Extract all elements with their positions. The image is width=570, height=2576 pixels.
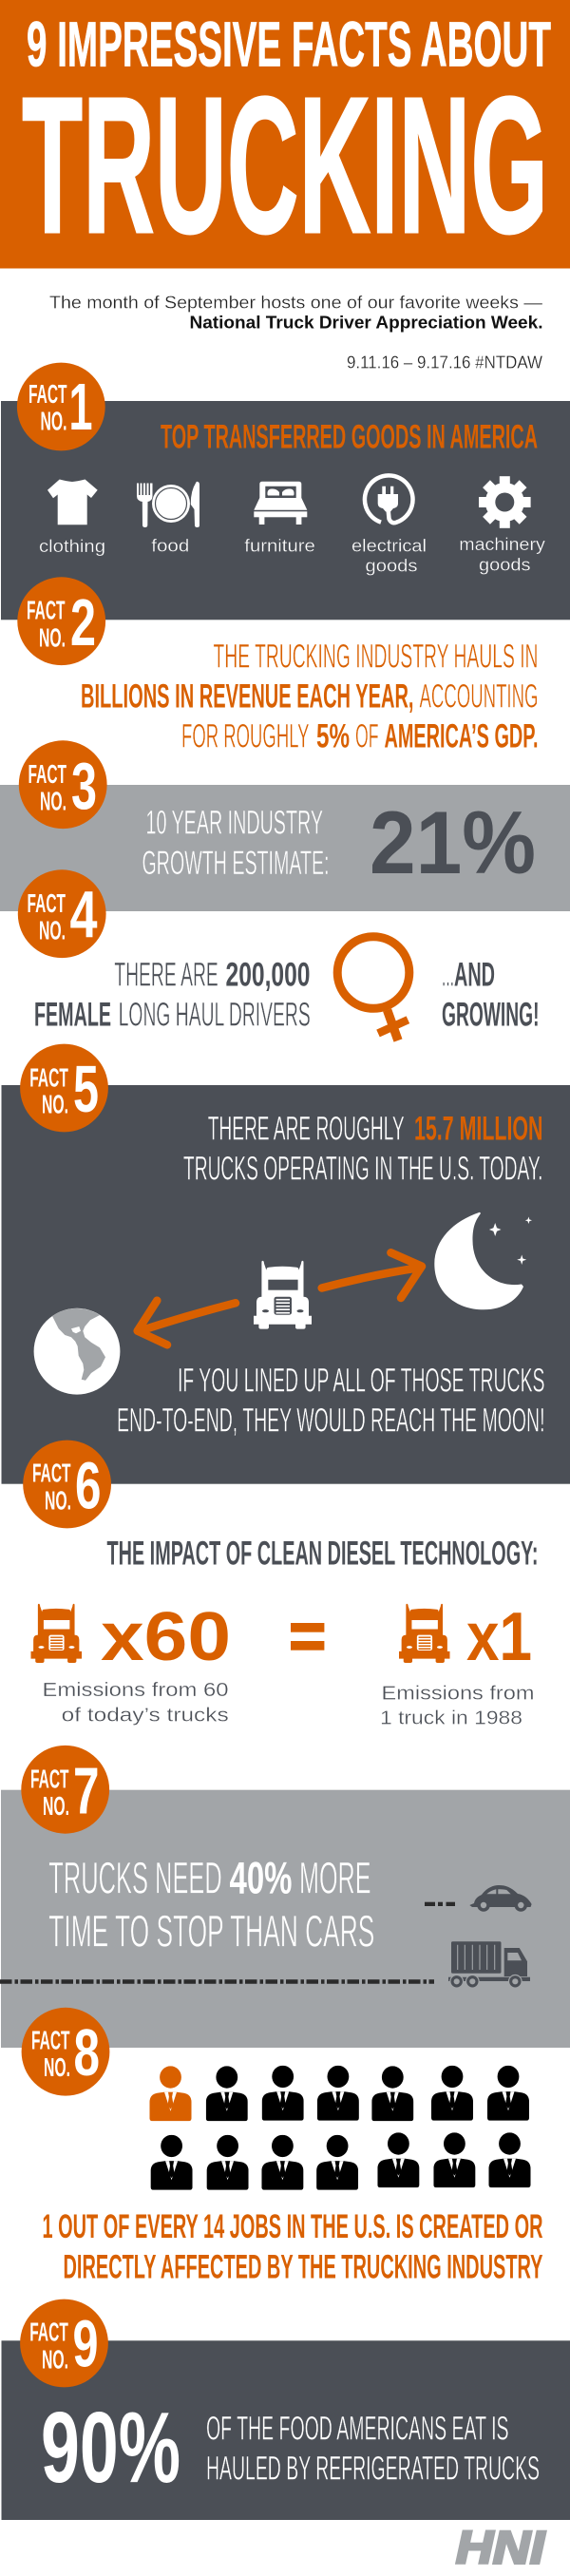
badge: fact no. 3: NO. <box>40 787 66 816</box>
dashed line: car stopping distance <box>425 1902 455 1906</box>
badge: fact no. 5: 5 <box>73 1052 99 1126</box>
text: stopping distance <box>48 1852 374 1956</box>
badge: fact no. 4: 4 <box>70 878 98 952</box>
panel: fact 5 trucks to the moon <box>2 1044 570 1484</box>
badge: fact no. 9: FACT <box>29 2317 68 2346</box>
intro text: 9.11.16 – 9.17.16 #NTDAW <box>347 353 542 372</box>
goods labels <box>39 534 546 575</box>
text: 15.7 million trucks: THERE ARE ROUGHLY <box>208 1109 405 1147</box>
goods labels: food <box>151 535 189 555</box>
badge: fact no. 3: FACT <box>28 759 66 789</box>
badge: fact no. 7: NO. <box>43 1791 69 1821</box>
caption: 60 trucks <box>42 1680 229 1727</box>
arrow: truck to moon <box>322 1252 422 1298</box>
text: stopping distance: MORE <box>299 1852 370 1902</box>
panel: fact 2 revenue <box>17 577 539 755</box>
badge: fact no. 8: FACT <box>31 2026 70 2055</box>
text: growth estimate label <box>142 804 329 882</box>
icon: earth <box>34 1308 120 1395</box>
badge: fact no. 6 <box>23 1441 111 1528</box>
text: 15.7 million trucks <box>183 1109 543 1188</box>
pictogram: 14 workers, one highlighted <box>150 2066 530 2190</box>
text: food hauled <box>206 2409 540 2487</box>
logo: HNI: HNI <box>456 2524 546 2573</box>
badge: fact no. 1: FACT <box>28 379 67 409</box>
icon: t-shirt <box>48 479 98 525</box>
badge: fact no. 2: NO. <box>39 623 66 653</box>
goods labels: electrical <box>352 535 427 555</box>
arrow: truck to earth <box>138 1301 236 1345</box>
goods labels: machinery <box>459 534 546 554</box>
panel: fact 8 jobs <box>22 2008 543 2285</box>
stat: x1: x1 <box>466 1599 532 1675</box>
text: female drivers count: THERE ARE <box>114 955 218 993</box>
badge: fact no. 6: FACT <box>32 1458 71 1487</box>
badge: fact no. 1 <box>17 363 105 450</box>
icon: box truck <box>448 1941 530 1988</box>
text: and growing <box>442 955 540 1033</box>
badge: fact no. 5: FACT <box>29 1062 68 1092</box>
goods labels: goods <box>479 554 530 574</box>
badge: fact no. 9: 9 <box>72 2307 99 2381</box>
goods labels: goods <box>365 555 418 575</box>
text: growth estimate label: 10 YEAR INDUSTRY <box>146 804 323 842</box>
goods labels: clothing <box>39 536 105 556</box>
text: stopping distance: 40% <box>230 1852 293 1902</box>
icon: moon and stars <box>434 1212 532 1309</box>
badge: fact no. 6: 6 <box>75 1448 101 1522</box>
badge: fact no. 5 <box>20 1044 108 1132</box>
panel: fact 9 refrigerated trucks <box>2 2299 570 2520</box>
header banner <box>0 0 570 274</box>
caption: 60 trucks: Emissions from 60 <box>42 1680 228 1701</box>
icon: orange truck left <box>30 1604 82 1663</box>
badge: fact no. 2: FACT <box>27 596 66 625</box>
stat: 90%: 90% <box>41 2392 180 2504</box>
panel: fact 6 clean diesel <box>23 1441 538 1728</box>
text: revenue statement: 5% <box>316 718 350 755</box>
badge: fact no. 3 <box>19 740 107 829</box>
badge: fact no. 2 <box>17 577 105 665</box>
icon: fork, plate and knife <box>137 482 200 527</box>
badge: fact no. 1: 1 <box>68 370 93 444</box>
stat: x60: x60 <box>101 1599 231 1675</box>
text: female drivers count: FEMALE <box>34 996 111 1033</box>
text: revenue statement: OF <box>355 717 378 755</box>
text: growth estimate label: GROWTH ESTIMATE: <box>142 844 329 882</box>
badge: fact no. 7 <box>21 1746 109 1834</box>
badge: fact no. 6: NO. <box>45 1485 71 1515</box>
panel: fact 4 female drivers <box>18 869 540 1040</box>
badge: fact no. 8: NO. <box>44 2052 70 2082</box>
dashed line: truck stopping distance <box>0 1979 434 1984</box>
goods labels: furniture <box>244 535 315 555</box>
badge: fact no. 4: NO. <box>39 915 66 945</box>
equals sign <box>291 1623 324 1651</box>
caption: 60 trucks: of today’s trucks <box>62 1706 229 1727</box>
caption: 1 truck: 1 truck in 1988 <box>380 1708 522 1728</box>
text: 1 in 14 jobs <box>42 2208 543 2285</box>
icon: car <box>469 1885 532 1912</box>
text: stopping distance: TRUCKS NEED <box>48 1852 222 1902</box>
badge: fact no. 9 <box>20 2299 108 2387</box>
intro text: National Truck Driver Appreciation Week. <box>190 313 543 333</box>
badge: fact no. 9: NO. <box>42 2345 68 2375</box>
badge: fact no. 7: FACT <box>30 1765 69 1794</box>
icon: electrical plug <box>365 475 413 523</box>
stat: 21%: 21% <box>370 792 536 892</box>
icon: female symbol <box>337 937 409 1040</box>
text: female drivers count: 200,000 <box>226 956 310 993</box>
text: revenue statement <box>81 637 538 755</box>
caption: 1 truck: Emissions from <box>382 1683 534 1704</box>
badge: fact no. 2: 2 <box>70 585 96 659</box>
intro text <box>49 293 543 372</box>
text: female drivers count <box>34 955 311 1033</box>
icon: orange truck right <box>399 1604 450 1663</box>
badge: fact no. 5: NO. <box>42 1090 68 1119</box>
caption: 1 truck <box>380 1683 534 1728</box>
panel: fact 3 growth estimate <box>0 740 570 911</box>
icon: bed <box>254 482 307 525</box>
text: and growing: ... <box>442 955 454 993</box>
text: and growing: AND <box>454 956 495 993</box>
panel: fact 7 stopping distance <box>0 1746 570 2048</box>
text: revenue statement: FOR ROUGHLY <box>181 717 310 755</box>
badge: fact no. 7: 7 <box>73 1754 99 1828</box>
badge: fact no. 8: 8 <box>74 2015 100 2089</box>
badge: fact no. 3: 3 <box>71 749 97 823</box>
badge: fact no. 1: NO. <box>40 407 66 436</box>
icon: truck front <box>254 1261 312 1329</box>
intro text: The month of September hosts one of our favorite weeks — <box>49 293 543 313</box>
badge: fact no. 4 <box>18 869 106 958</box>
text: reach the moon <box>117 1361 545 1440</box>
icon: gear <box>479 476 531 528</box>
text: female drivers count: LONG HAUL DRIVERS <box>119 995 311 1033</box>
badge: fact no. 8 <box>22 2008 109 2096</box>
badge: fact no. 4: FACT <box>27 888 66 918</box>
panel: fact 1 top transferred goods <box>1 363 570 620</box>
